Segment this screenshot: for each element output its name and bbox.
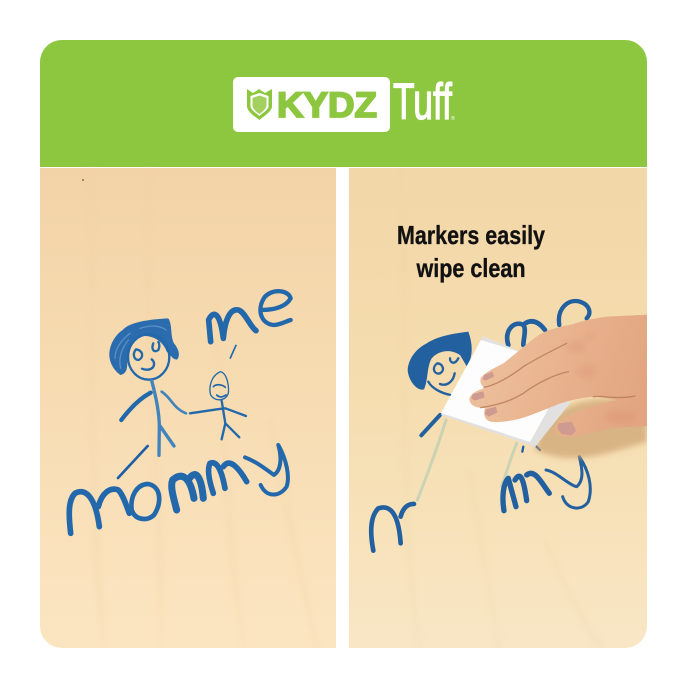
hair and head [408, 332, 472, 390]
word: mommy remains (m) [371, 504, 414, 551]
card panel [40, 40, 660, 648]
word: me remains [507, 321, 545, 345]
partly erased drawing [371, 301, 590, 551]
hand-drawn family picture [69, 291, 291, 533]
child [210, 372, 229, 400]
paper towel [441, 336, 571, 447]
hair strands [115, 326, 166, 368]
mother body [152, 381, 174, 455]
knuckle redness [570, 342, 626, 419]
icon: shield [247, 89, 272, 120]
photo: wiping the marker clean [349, 168, 660, 648]
logo badge [233, 77, 390, 132]
product name: Tuff [393, 73, 453, 130]
brand name: KYDZ [277, 86, 377, 125]
registered mark: ® [451, 115, 455, 122]
photo: marker drawing on wood [40, 168, 336, 648]
arms [121, 393, 151, 420]
head [128, 334, 169, 380]
word: mommy remains (my) [503, 473, 549, 511]
caption: wipe clean [416, 253, 526, 283]
word: mommy [69, 489, 129, 533]
hand [469, 314, 660, 437]
caption [397, 220, 545, 283]
apostrophe mark [230, 345, 236, 358]
hand outline [469, 314, 660, 437]
leg stroke [118, 446, 148, 478]
shadow under hand [535, 399, 647, 458]
fingernails [471, 372, 576, 435]
hair [109, 318, 179, 375]
remaining leg stroke [421, 415, 440, 435]
faint wipe trails [417, 420, 517, 500]
header band [40, 40, 647, 167]
KYDZ Tuff logo [233, 73, 455, 132]
caption: Markers easily [397, 220, 545, 250]
eyes and smile [134, 342, 159, 370]
finger creases [481, 343, 635, 408]
word: me [209, 310, 256, 342]
